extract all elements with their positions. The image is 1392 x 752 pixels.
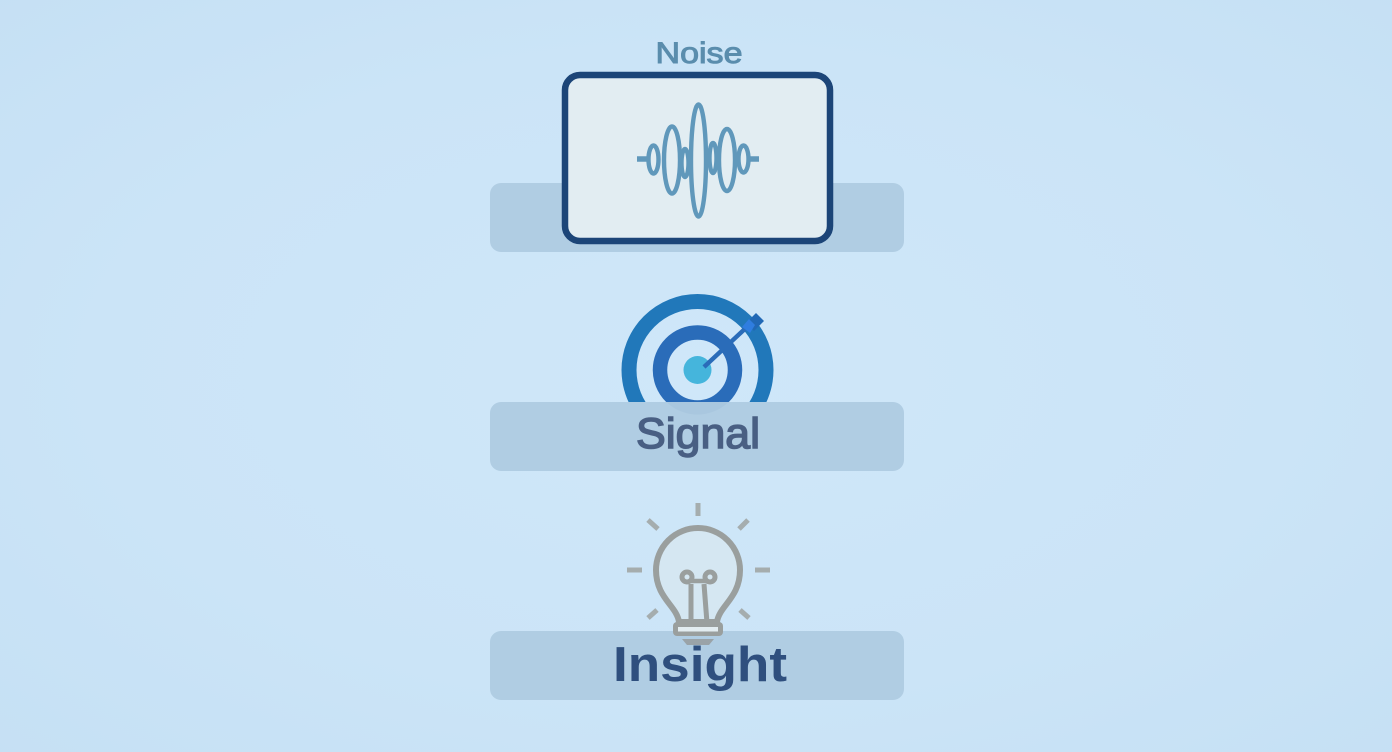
icon: sound wave <box>637 104 759 216</box>
band: signal <box>490 402 904 471</box>
panel: insight <box>490 503 904 700</box>
band: noise <box>490 183 904 252</box>
infographic canvas <box>490 41 904 700</box>
card: noise <box>565 75 830 241</box>
faint target shadow <box>666 402 728 415</box>
icon: light bulb <box>627 503 770 645</box>
band: insight <box>490 631 904 700</box>
heading: Noise: Noise <box>656 37 742 70</box>
heading: Insight: Insight <box>613 638 787 692</box>
panel: signal <box>490 302 904 471</box>
panel: noise <box>490 37 904 252</box>
icon: target with arrow <box>622 294 774 402</box>
heading: Signal: Signal <box>636 410 760 458</box>
